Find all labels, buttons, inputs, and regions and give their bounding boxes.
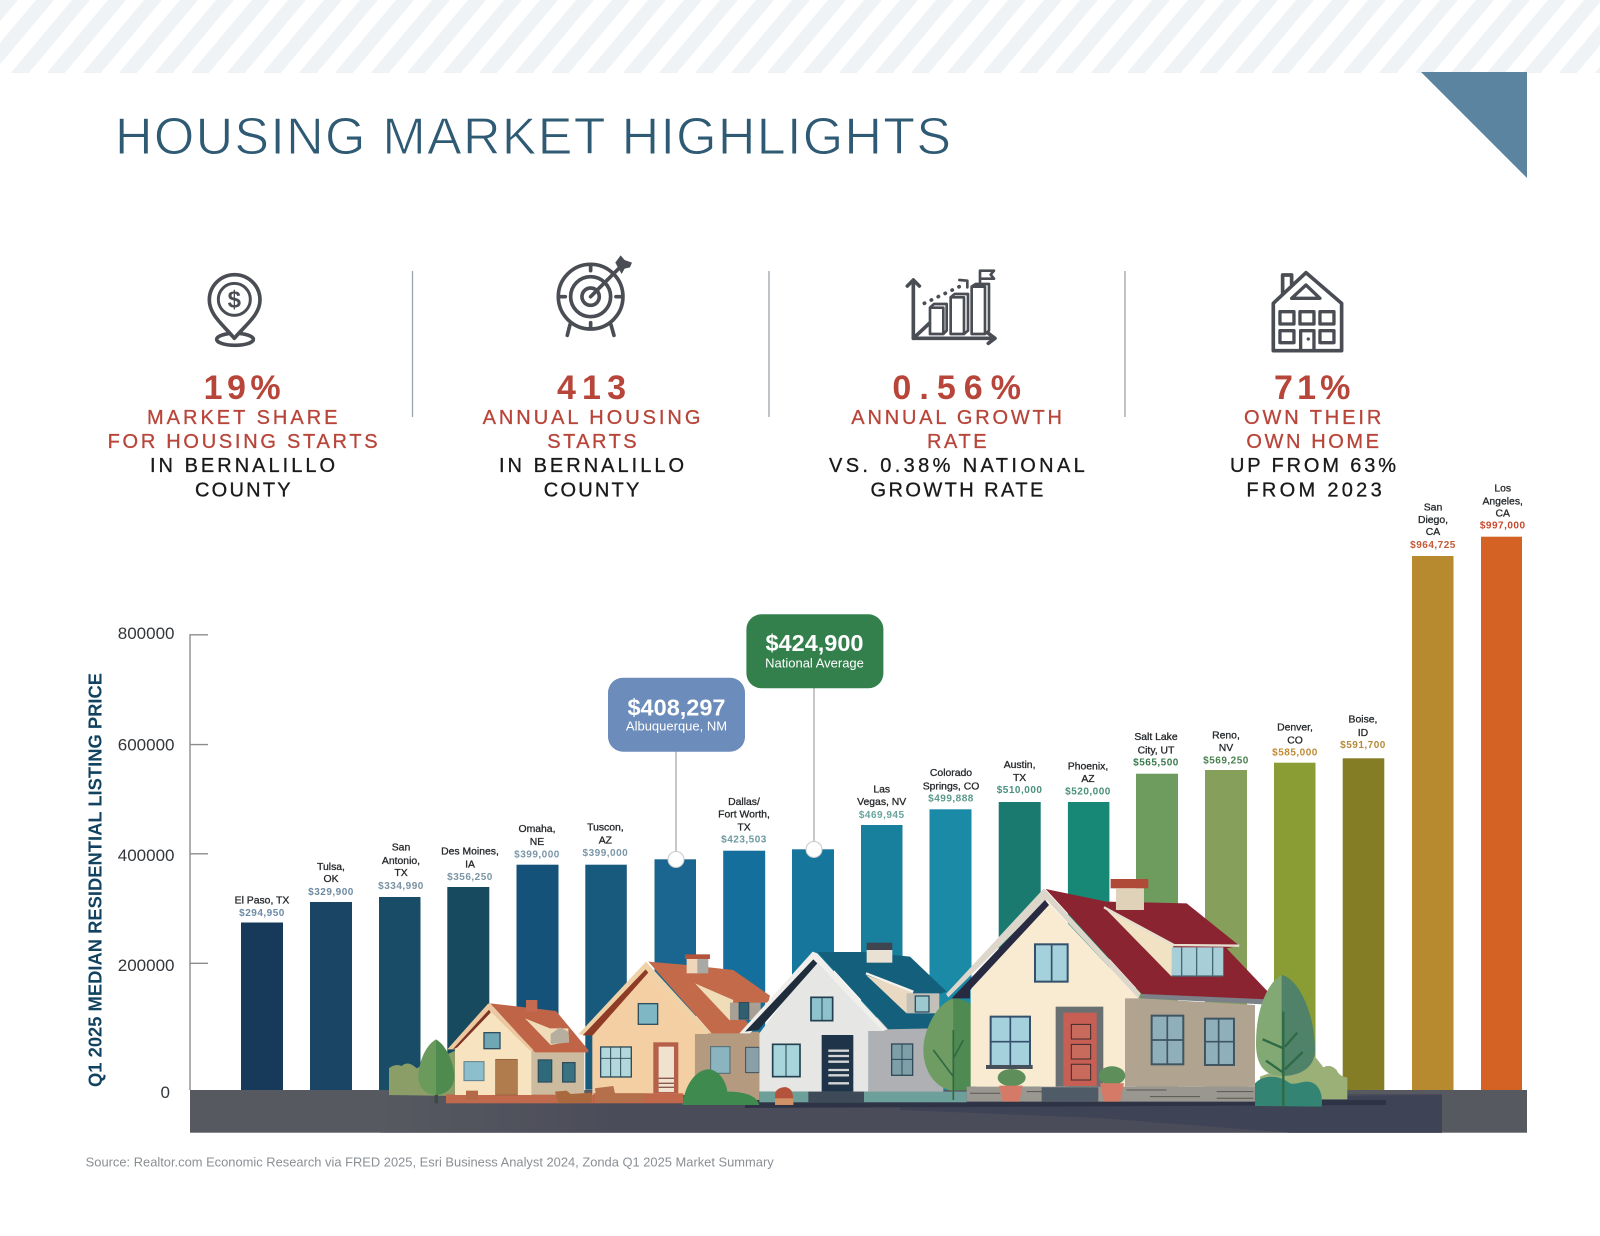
bar labels: Colorado: [930, 768, 972, 779]
bar labels: $591,700: [1340, 740, 1386, 751]
icon: target with arrow: [558, 255, 632, 335]
stat value 413: 413: [557, 369, 626, 407]
illustration: small house: [446, 1000, 593, 1103]
stat label: FOR HOUSING STARTS: [108, 431, 378, 453]
bar labels: City, UT: [1138, 745, 1175, 756]
bar labels: CA: [1426, 527, 1440, 538]
bar labels: CA: [1495, 508, 1510, 519]
panel: annual growth rate stat: [829, 271, 1085, 502]
y axis and ticks: [190, 635, 208, 1090]
icon: house: [1273, 273, 1342, 351]
stat label: STARTS: [547, 431, 637, 453]
y axis labels: 400000: [118, 846, 174, 865]
bars: [241, 537, 1522, 1091]
bar labels: IA: [465, 859, 475, 870]
bar labels: $334,990: [378, 881, 424, 892]
bar labels: Springs, CO: [923, 781, 979, 792]
bar labels: Des Moines,: [441, 847, 499, 858]
bar labels: TX: [394, 868, 408, 879]
bar labels: $510,000: [997, 785, 1042, 796]
illustration: right tree and bushes: [1255, 975, 1347, 1107]
bar labels: OK: [323, 874, 339, 885]
bar labels: ID: [1358, 728, 1368, 739]
bar labels: Los: [1494, 484, 1511, 495]
bar labels: $423,503: [721, 835, 767, 846]
stat label: GROWTH RATE: [870, 480, 1043, 502]
stat label: IN BERNALILLO: [150, 455, 335, 477]
bar labels: San: [1424, 502, 1442, 513]
bar labels: Phoenix,: [1068, 761, 1108, 772]
bar labels: $399,000: [514, 849, 560, 860]
stat label: VS. 0.38% NATIONAL: [829, 455, 1085, 477]
callout: national average: [746, 614, 883, 858]
bar labels: AZ: [1081, 774, 1095, 785]
source note: Source: Realtor.com Economic Research via FRED 2025, Esri Business Analyst 2024, Zonda Q1 2025 Market Summary: [86, 1156, 774, 1170]
stat value 0.56%: 0.56%: [892, 369, 1021, 407]
bar labels: Austin,: [1004, 760, 1035, 771]
stat label: OWN HOME: [1246, 431, 1379, 453]
bar labels: $329,900: [308, 887, 354, 898]
divider lines: [412, 271, 1125, 417]
icon: rising bar chart with flag: [907, 271, 995, 343]
bar labels: Fort Worth,: [718, 809, 770, 820]
callout: national average: National Average: [765, 655, 864, 670]
callout: Albuquerque: $408,297: [627, 694, 726, 720]
bar labels: TX: [737, 822, 751, 833]
callout: national average: $424,900: [765, 630, 864, 656]
bar labels: Tulsa,: [317, 862, 345, 873]
illustration: large red-roof house: [946, 879, 1273, 1102]
stat label: [483, 407, 700, 502]
chart: median listing price bar chart: [85, 484, 1526, 1102]
bar labels: $565,500: [1133, 758, 1179, 769]
stat label: [829, 407, 1085, 502]
callout: Albuquerque: [608, 678, 745, 868]
stat label: [108, 407, 378, 502]
bar labels: NE: [530, 837, 544, 848]
bar labels: Antonio,: [382, 856, 420, 867]
y axis labels: [118, 624, 174, 1102]
illustration: tree between houses: [923, 998, 977, 1100]
y axis labels: 600000: [118, 736, 174, 755]
illustration: second house: [578, 954, 770, 1105]
bar labels: El Paso, TX: [235, 895, 289, 906]
bar labels: TX: [1013, 773, 1026, 784]
y axis title: Q1 2025 MEDIAN RESIDENTIAL LISTING PRICE: [85, 673, 106, 1087]
bar labels: NV: [1219, 743, 1233, 754]
bar labels: Boise,: [1349, 715, 1377, 726]
bar labels: Angeles,: [1482, 496, 1523, 507]
stat label: MARKET SHARE: [147, 407, 338, 429]
illustration: left tree and bush: [389, 1039, 457, 1103]
bar labels: Salt Lake: [1134, 732, 1178, 743]
bar labels: Diego,: [1418, 515, 1448, 526]
icon: dollar location pin: [209, 275, 260, 345]
illustration: third house: [739, 943, 967, 1105]
bar labels: Omaha,: [519, 824, 555, 835]
stat label: IN BERNALILLO: [499, 455, 684, 477]
icon: dollar location pin: $: [228, 287, 241, 314]
bar labels: $294,950: [239, 908, 285, 919]
bar labels: Tuscon,: [587, 823, 624, 834]
panel: home ownership stat: [1230, 273, 1396, 502]
bar labels: $964,725: [1410, 540, 1456, 551]
stat label: FROM 2023: [1246, 480, 1382, 502]
bar labels: $356,250: [447, 872, 493, 883]
bar labels: San: [392, 842, 410, 853]
stat value 71%: 71%: [1274, 369, 1350, 407]
bar labels: $585,000: [1272, 747, 1318, 758]
striped header band: [0, 0, 1600, 73]
y axis labels: 0: [161, 1083, 170, 1102]
ground: [190, 1090, 1527, 1133]
bar labels: $469,945: [859, 810, 905, 821]
stat label: ANNUAL GROWTH: [851, 407, 1062, 429]
bar labels: Denver,: [1277, 722, 1313, 733]
bar labels: CO: [1287, 735, 1303, 746]
y axis labels: 200000: [118, 956, 174, 975]
stat value 19%: 19%: [204, 369, 281, 407]
corner triangle: [1421, 72, 1527, 178]
bar labels: Dallas/: [728, 797, 760, 808]
bar labels: AZ: [599, 835, 613, 846]
panel: market share stat: [108, 275, 378, 502]
title: HOUSING MARKET HIGHLIGHTS: [115, 108, 951, 166]
panel: annual housing starts stat: [483, 255, 700, 502]
stat label: UP FROM 63%: [1230, 455, 1396, 477]
bar labels: Las: [873, 785, 890, 796]
stat label: RATE: [927, 431, 987, 453]
bar labels: Reno,: [1212, 730, 1240, 741]
bar labels: $399,000: [583, 848, 628, 859]
bar labels: $499,888: [928, 793, 974, 804]
bar labels: $997,000: [1480, 521, 1526, 532]
callout: Albuquerque: Albuquerque, NM: [626, 719, 727, 734]
stat label: OWN THEIR: [1244, 407, 1381, 429]
stat label: [1230, 407, 1396, 502]
bar labels: [235, 484, 1526, 919]
bar labels: Vegas, NV: [857, 797, 906, 808]
stat label: COUNTY: [544, 480, 639, 502]
stat label: ANNUAL HOUSING: [483, 407, 700, 429]
bar labels: $569,250: [1203, 755, 1249, 766]
y axis labels: 800000: [118, 624, 174, 643]
stat label: COUNTY: [195, 480, 291, 502]
bar labels: $520,000: [1065, 787, 1111, 798]
